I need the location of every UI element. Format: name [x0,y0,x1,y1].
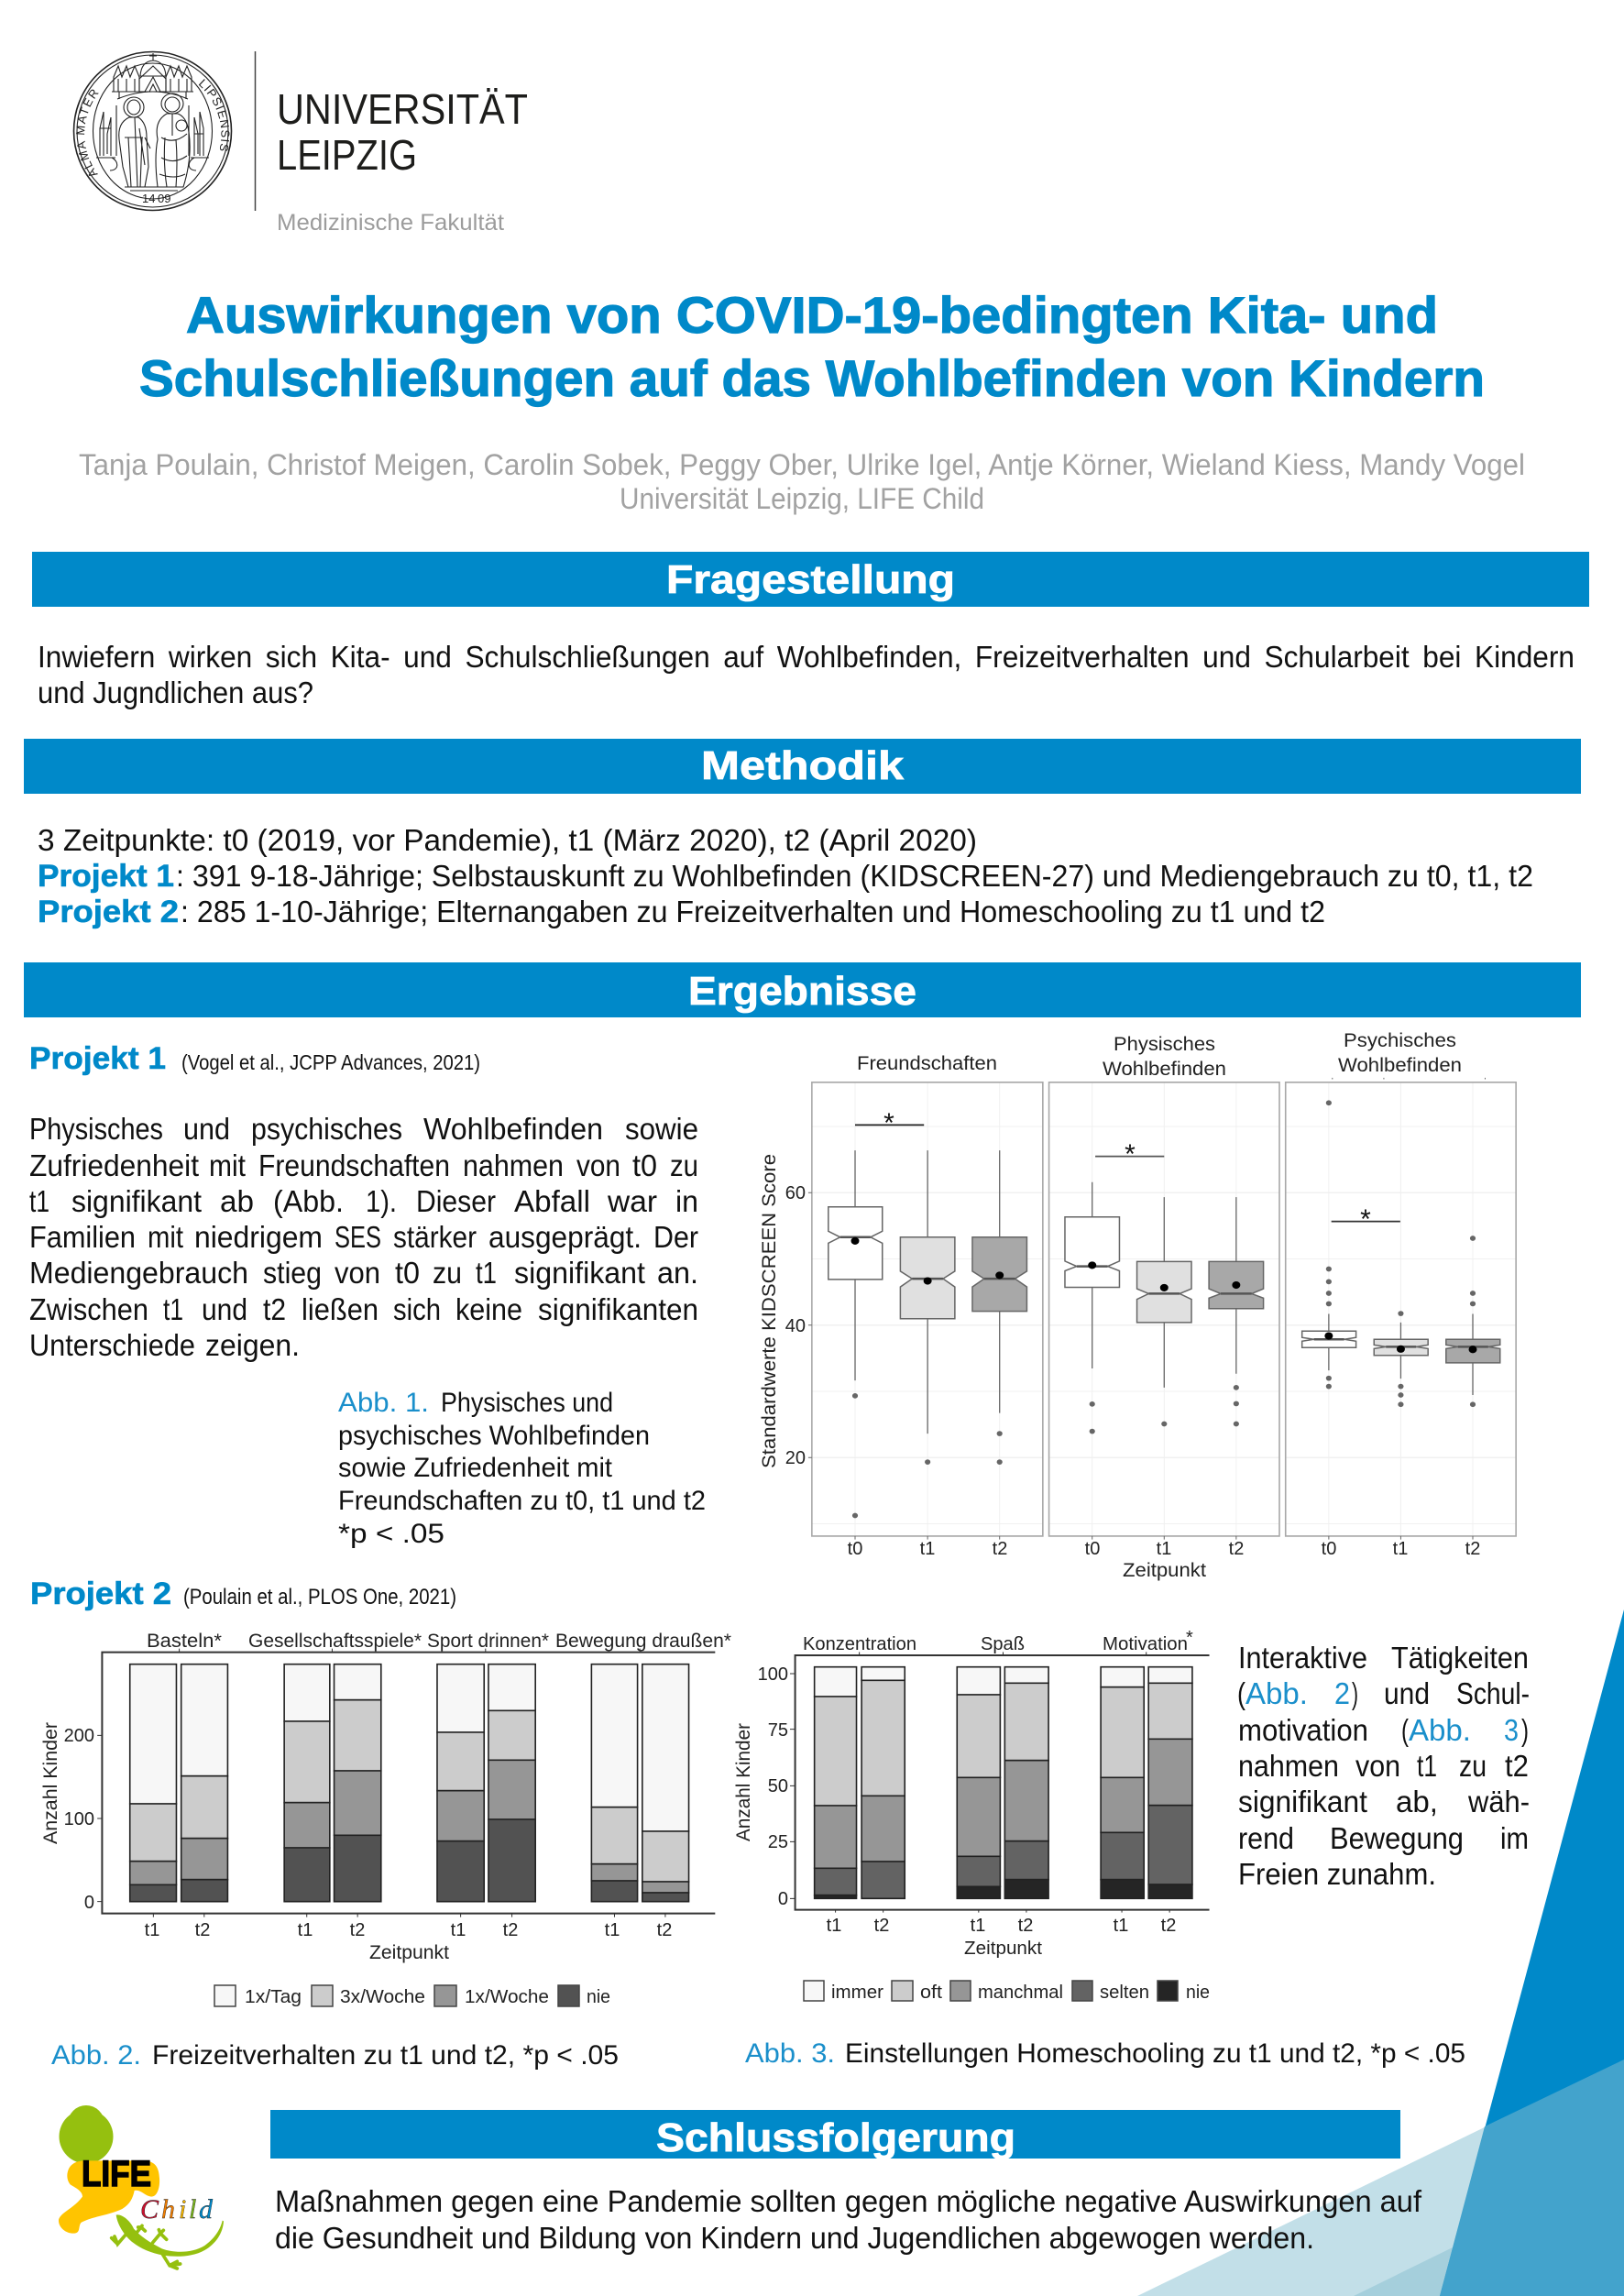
methods text: Projekt 1 [38,859,174,894]
text block: Projekt 1 results: SES [335,1220,381,1254]
legend [214,1985,610,2007]
legend [804,1981,1210,2003]
medians [840,1237,1488,1346]
heading bar: Schlussfolgerung [270,2110,1400,2160]
text block: Projekt 1 results: Physisches [29,1112,163,1146]
facet titles [147,1631,731,1652]
text block: Projekt 1 results: signifikanten [538,1292,698,1326]
x axis tick labels: t1 [920,1539,935,1559]
text block: Projekt 2 results: Tätigkeiten [1391,1641,1529,1675]
text block: Projekt 2 results: ( [1237,1676,1245,1710]
text block: Projekt 1 results: sowie [625,1112,698,1146]
caption: Abb. 1: *p < .05 [338,1519,444,1549]
x axis tick labels: t2 [1229,1539,1244,1559]
x axis title: Zeitpunkt [369,1942,449,1963]
text block: Projekt 2 results: signifikant [1238,1785,1367,1818]
text block: Projekt 2 results: im [1500,1821,1529,1855]
text block: Projekt 1 results: stieg [263,1256,322,1290]
outliers [852,1100,1476,1518]
text block: Projekt 2 results: Abb. [1245,1676,1308,1710]
legend: selten [1100,1983,1149,2003]
conclusion text [275,2184,1422,2255]
text block: Projekt 1 results: sich [393,1292,441,1326]
text block: Projekt 1 results: Unterschiede [29,1328,195,1362]
heading bar: Fragestellung [32,552,1589,607]
panel: Fragestellung [32,552,1589,709]
Child wordmark: l [189,2194,196,2225]
text block: Projekt 1 results: ausgeprägt. [488,1220,642,1254]
y axis tick labels: 25 [768,1832,788,1852]
heading: Projekt 2: (Poulain et al., PLOS One, 2021) [183,1585,456,1609]
logo: LIFE Child [59,2105,224,2269]
caption: Abb. 1: sowie Zufriedenheit mit [338,1453,613,1483]
x axis tick labels: t0 [1322,1539,1336,1559]
y axis title: Anzahl Kinder [733,1723,754,1841]
x axis title: Zeitpunkt [964,1939,1042,1959]
text block: Projekt 1 results: zeigen. [205,1328,300,1362]
legend: 1x/Woche [465,1987,549,2007]
text block: Projekt 1 results: Mediengebrauch [29,1256,248,1290]
caption: Abb. 2: Freizeitverhalten zu t1 und t2, *p < .05 [152,2040,619,2071]
heading: Projekt 1: (Vogel et al., JCPP Advances, 2021) [181,1050,480,1074]
legend: oft [920,1983,942,2003]
methods text [38,823,1533,929]
text block: Projekt 1 results: Zufriedenheit [29,1148,199,1182]
text block: Projekt 1 results: zu [670,1148,698,1182]
text block: Projekt 2 results: t2 [1505,1749,1529,1783]
text block: Projekt 1 results: Freundschaften [258,1148,450,1182]
facet titles [857,1030,1462,1080]
text block: Projekt 2 results [1237,1641,1530,1891]
icon: university seal: 09 [158,192,170,205]
wordmark: LEIPZIG [277,131,417,179]
caption: Abb. 2: Abb. 2. [51,2040,141,2071]
text block: Projekt 2 results: ab, [1396,1785,1438,1818]
text block: Projekt 2 results: rend [1238,1821,1294,1855]
x axis tick labels [145,1920,672,1940]
caption: Abb. 1: psychisches Wohlbefinden [338,1421,650,1451]
panel: Schlussfolgerung [270,2110,1422,2255]
research question text: und Jugndlichen aus? [38,676,313,709]
logo: Universität Leipzig [73,51,528,236]
x axis tick labels: t2 [350,1920,365,1940]
LIFE wordmark: LIFE [82,2154,151,2194]
caption: Abb. 3: Abb. 3. [745,2038,835,2069]
heading bar: Methodik [24,739,1581,794]
plot: stacked bars [790,1652,1210,1913]
icon: lizard [112,2214,224,2269]
conclusion text: Maßnahmen gegen eine Pandemie sollten gegen mögliche negative Auswirkungen auf [275,2184,1422,2218]
significance stars: * [1125,1139,1136,1170]
text block: Projekt 1 results: in [675,1184,698,1218]
panel: Methodik [24,739,1581,929]
text block: Projekt 1 results: ließen [302,1292,379,1326]
facet titles: Freundschaften [857,1053,997,1074]
y axis tick labels: 20 [785,1448,806,1468]
text block: Projekt 1 results: t1 [476,1256,497,1290]
axis ticks [808,1078,1485,1540]
facet titles: Physisches [1114,1034,1215,1055]
heading: Projekt 2 [30,1576,456,1611]
legend: nie [1186,1983,1210,2003]
significance stars: * [1360,1204,1371,1235]
significance stars [883,1108,1371,1235]
caption: Abb. 3: Einstellungen Homeschooling zu t1 und t2, *p < .05 [845,2038,1465,2069]
text block: Projekt 1 results: mit [209,1148,246,1182]
facet titles: Basteln* [147,1631,222,1652]
facet titles: Konzentration [803,1634,916,1654]
text block: Projekt 2 results: t1 [1417,1749,1437,1783]
text block: Projekt 1 results: Abfall [514,1184,590,1218]
text block: Projekt 1 results: keine [455,1292,522,1326]
x axis tick labels: t1 [145,1920,159,1940]
wordmark [277,85,528,179]
text block: Projekt 1 results: war [607,1184,657,1218]
text block: Projekt 2 results: Bewegung [1330,1821,1464,1855]
authors [79,448,1525,515]
methods text: : 391 9-18-Jährige; Selbstauskunft zu Wohlbefinden (KIDSCREEN-27) und Mediengebrauch zu t0, t1, t2 [176,859,1533,893]
y axis tick labels: 100 [758,1664,788,1685]
legend: immer [831,1983,883,2003]
text block: Projekt 2 results: 2 [1334,1676,1350,1710]
chart: KIDSCREEN box plots [759,1030,1516,1581]
title [139,286,1485,407]
Child wordmark [140,2194,214,2225]
x axis tick labels: t0 [848,1539,862,1559]
Child wordmark: d [199,2194,214,2225]
text block: Projekt 2 results: wäh- [1467,1785,1530,1818]
text block: Projekt 2 results: nahmen [1238,1749,1339,1783]
methods text: : 285 1-10-Jährige; Elternangaben zu Freizeitverhalten und Homeschooling zu t1 und t2 [181,895,1325,928]
text block: Projekt 1 results: Dieser [416,1184,496,1218]
text block: Projekt 1 results: t2 [263,1292,286,1326]
text block: Projekt 1 results: ab [220,1184,254,1218]
text block: Projekt 1 results: mit [148,1220,183,1254]
divider line [255,51,257,211]
faculty name: Medizinische Fakultät [277,210,504,236]
x axis tick labels: t2 [1465,1539,1480,1559]
y axis tick labels: 100 [64,1809,94,1829]
text block: Projekt 2 results: ( [1401,1713,1409,1747]
icon: university seal [73,51,233,211]
text block: Projekt 1 results: t0 [632,1148,657,1182]
y axis tick labels: 0 [84,1893,94,1913]
text block: Projekt 1 results: und [183,1112,230,1146]
significance stars: * [883,1108,894,1138]
x axis tick labels: t0 [1085,1539,1100,1559]
y axis tick labels: 50 [768,1776,788,1796]
Child wordmark: i [179,2194,186,2225]
caption: Abb. 1: Abb. 1. [338,1388,429,1418]
text block: Projekt 2 results: von [1355,1749,1400,1783]
text block: Projekt 1 results: t1 [29,1184,49,1218]
research question text [38,640,1575,709]
caption: Abb. 1: Freundschaften zu t0, t1 und t2 [338,1486,706,1516]
x axis tick labels [848,1539,1480,1559]
title: Schulschließungen auf das Wohlbefinden von Kindern [139,349,1485,407]
text block: Projekt 2 results: zu [1459,1749,1487,1783]
y axis tick labels: 200 [64,1726,94,1746]
facet titles: Motivation [1103,1634,1188,1654]
text block: Projekt 2 results: und [1384,1676,1430,1710]
x axis tick labels: t2 [195,1920,210,1940]
text block: Projekt 2 results: Freien zunahm. [1238,1857,1436,1891]
text block: Projekt 2 results: motivation [1238,1713,1368,1747]
x axis tick labels: t2 [503,1920,518,1940]
x axis tick labels: t2 [874,1916,889,1936]
heading: Projekt 1: Projekt 1 [29,1041,166,1076]
x axis tick labels: t2 [993,1539,1007,1559]
chart: Homeschooling stacked bars [733,1628,1210,2003]
heading: Projekt 2: Projekt 2 [30,1576,171,1611]
text block: Projekt 1 results: Der [653,1220,698,1254]
x axis tick labels: t1 [1393,1539,1408,1559]
caption: Abb. 1 [338,1388,706,1549]
authors: Universität Leipzig, LIFE Child [620,482,984,515]
text block: Projekt 2 results: Interaktive [1238,1641,1367,1675]
y axis tick labels [758,1664,788,1909]
text block: Projekt 1 results: psychisches [251,1112,402,1146]
text block: Projekt 1 results: und [202,1292,247,1326]
heading bar: Fragestellung: Fragestellung [666,557,955,602]
plot area: box plots [808,1078,1516,1540]
text block: Projekt 1 results: Zwischen [29,1292,148,1326]
y axis tick labels [64,1726,94,1913]
text block: Projekt 1 results: nahmen [463,1148,564,1182]
x axis title: Zeitpunkt [1123,1560,1206,1581]
text block: Projekt 1 results: von [335,1256,380,1290]
facet titles: Wohlbefinden [1338,1055,1462,1076]
means [851,1237,1476,1353]
x axis tick labels: t1 [451,1920,466,1940]
legend: manchmal [978,1983,1063,2003]
x axis tick labels: t1 [1157,1539,1171,1559]
text block: Projekt 1 results: zu [433,1256,462,1290]
y axis tick labels [785,1183,806,1468]
methods text: 3 Zeitpunkte: t0 (2019, vor Pandemie), t1 (März 2020), t2 (April 2020) [38,823,977,857]
chart: Freizeitverhalten stacked bars [40,1631,731,2007]
facet titles: * [1186,1628,1193,1648]
y axis tick labels: 40 [785,1316,806,1336]
facet titles: Bewegung draußen* [555,1631,731,1652]
icon: yellow blob [59,2160,159,2234]
y axis tick labels: 0 [778,1889,788,1909]
icon: university seal: LIPSIENSIS [198,79,229,151]
facet titles: Spaß [981,1634,1025,1654]
text block: Projekt 1 results: (Abb. [273,1184,344,1218]
icon: university seal: 14 [142,192,155,205]
heading bar: Ergebnisse [24,962,1581,1017]
heading bar: Ergebnisse: Ergebnisse [688,969,916,1014]
significance bars [855,1125,1400,1222]
heading bar: Schlussfolgerung: Schlussfolgerung [656,2115,1015,2160]
conclusion text: die Gesundheit und Bildung von Kindern und Jugendlichen abgewogen werden. [275,2221,1314,2255]
text block: Projekt 1 results: Familien [29,1220,136,1254]
panel borders [812,1082,1516,1536]
text block: Projekt 1 results: 1). [366,1184,397,1218]
text block: Projekt 1 results: von [576,1148,620,1182]
x axis tick labels: t1 [971,1916,985,1936]
x axis tick labels: t1 [827,1916,841,1936]
text block: Projekt 1 results: signifikant [514,1256,645,1290]
heading bar: Methodik: Methodik [701,743,905,788]
text block: Projekt 1 results: Wohlbefinden [423,1112,603,1146]
wordmark: UNIVERSITÄT [277,85,528,133]
Child wordmark: h [161,2194,175,2225]
text block: Projekt 1 results [29,1112,698,1362]
research question text: Inwiefern wirken sich Kita- und Schulschließungen auf Wohlbefinden, Freizeitverhalten und Schularbeit bei Kindern [38,640,1575,674]
heading: Projekt 1 [29,1041,480,1076]
y axis title: Standardwerte KIDSCREEN Score [759,1154,780,1468]
text block: Projekt 1 results: an. [657,1256,698,1290]
boxes [828,1207,1500,1363]
text block: Projekt 2 results: Abb. [1409,1713,1471,1747]
x axis tick labels: t2 [657,1920,672,1940]
facet titles: Psychisches [1344,1030,1456,1051]
caption: Abb. 1: Physisches und [441,1388,613,1418]
x axis tick labels: t2 [1161,1916,1176,1936]
icon: tree [59,2105,114,2163]
facet titles: Sport drinnen* [427,1631,549,1652]
y axis tick labels: 60 [785,1183,806,1203]
text block: Projekt 2 results: 3 [1504,1713,1519,1747]
x axis tick labels: t1 [1114,1916,1128,1936]
y axis tick labels: 75 [768,1720,788,1741]
text block: Projekt 1 results: signifikant [71,1184,202,1218]
legend: 3x/Woche [340,1987,425,2007]
text block: Projekt 1 results: stärker [393,1220,477,1254]
x axis tick labels: t1 [605,1920,620,1940]
decorative corner triangles [1137,1609,1624,2296]
x axis tick labels: t2 [1018,1916,1033,1936]
plot: stacked bars [97,1649,715,1917]
legend: nie [587,1987,610,2007]
x axis tick labels: t1 [298,1920,313,1940]
text block: Projekt 2 results: ) [1352,1676,1358,1710]
facet titles: Gesellschaftsspiele* [248,1631,422,1652]
facet titles: Wohlbefinden [1103,1059,1226,1080]
Child wordmark: C [140,2194,159,2225]
text block: Projekt 1 results: niedrigem [194,1220,323,1254]
y axis title: Anzahl Kinder [40,1722,61,1844]
text block: Projekt 1 results: t1 [163,1292,183,1326]
authors: Tanja Poulain, Christof Meigen, Carolin Sobek, Peggy Ober, Ulrike Igel, Antje Körner, Wieland Kiess, Mandy Vogel [79,448,1525,481]
text block: Projekt 2 results: Schul- [1456,1676,1530,1710]
methods text: Projekt 2 [38,895,179,929]
title: Auswirkungen von COVID-19-bedingten Kita- und [186,286,1438,344]
icon: university seal: ALMA MATER [76,90,99,176]
facet titles [803,1628,1193,1654]
text block: Projekt 1 results: t0 [395,1256,420,1290]
text block: Projekt 2 results: ) [1521,1713,1529,1747]
legend: 1x/Tag [245,1987,302,2007]
x axis tick labels [827,1916,1176,1936]
